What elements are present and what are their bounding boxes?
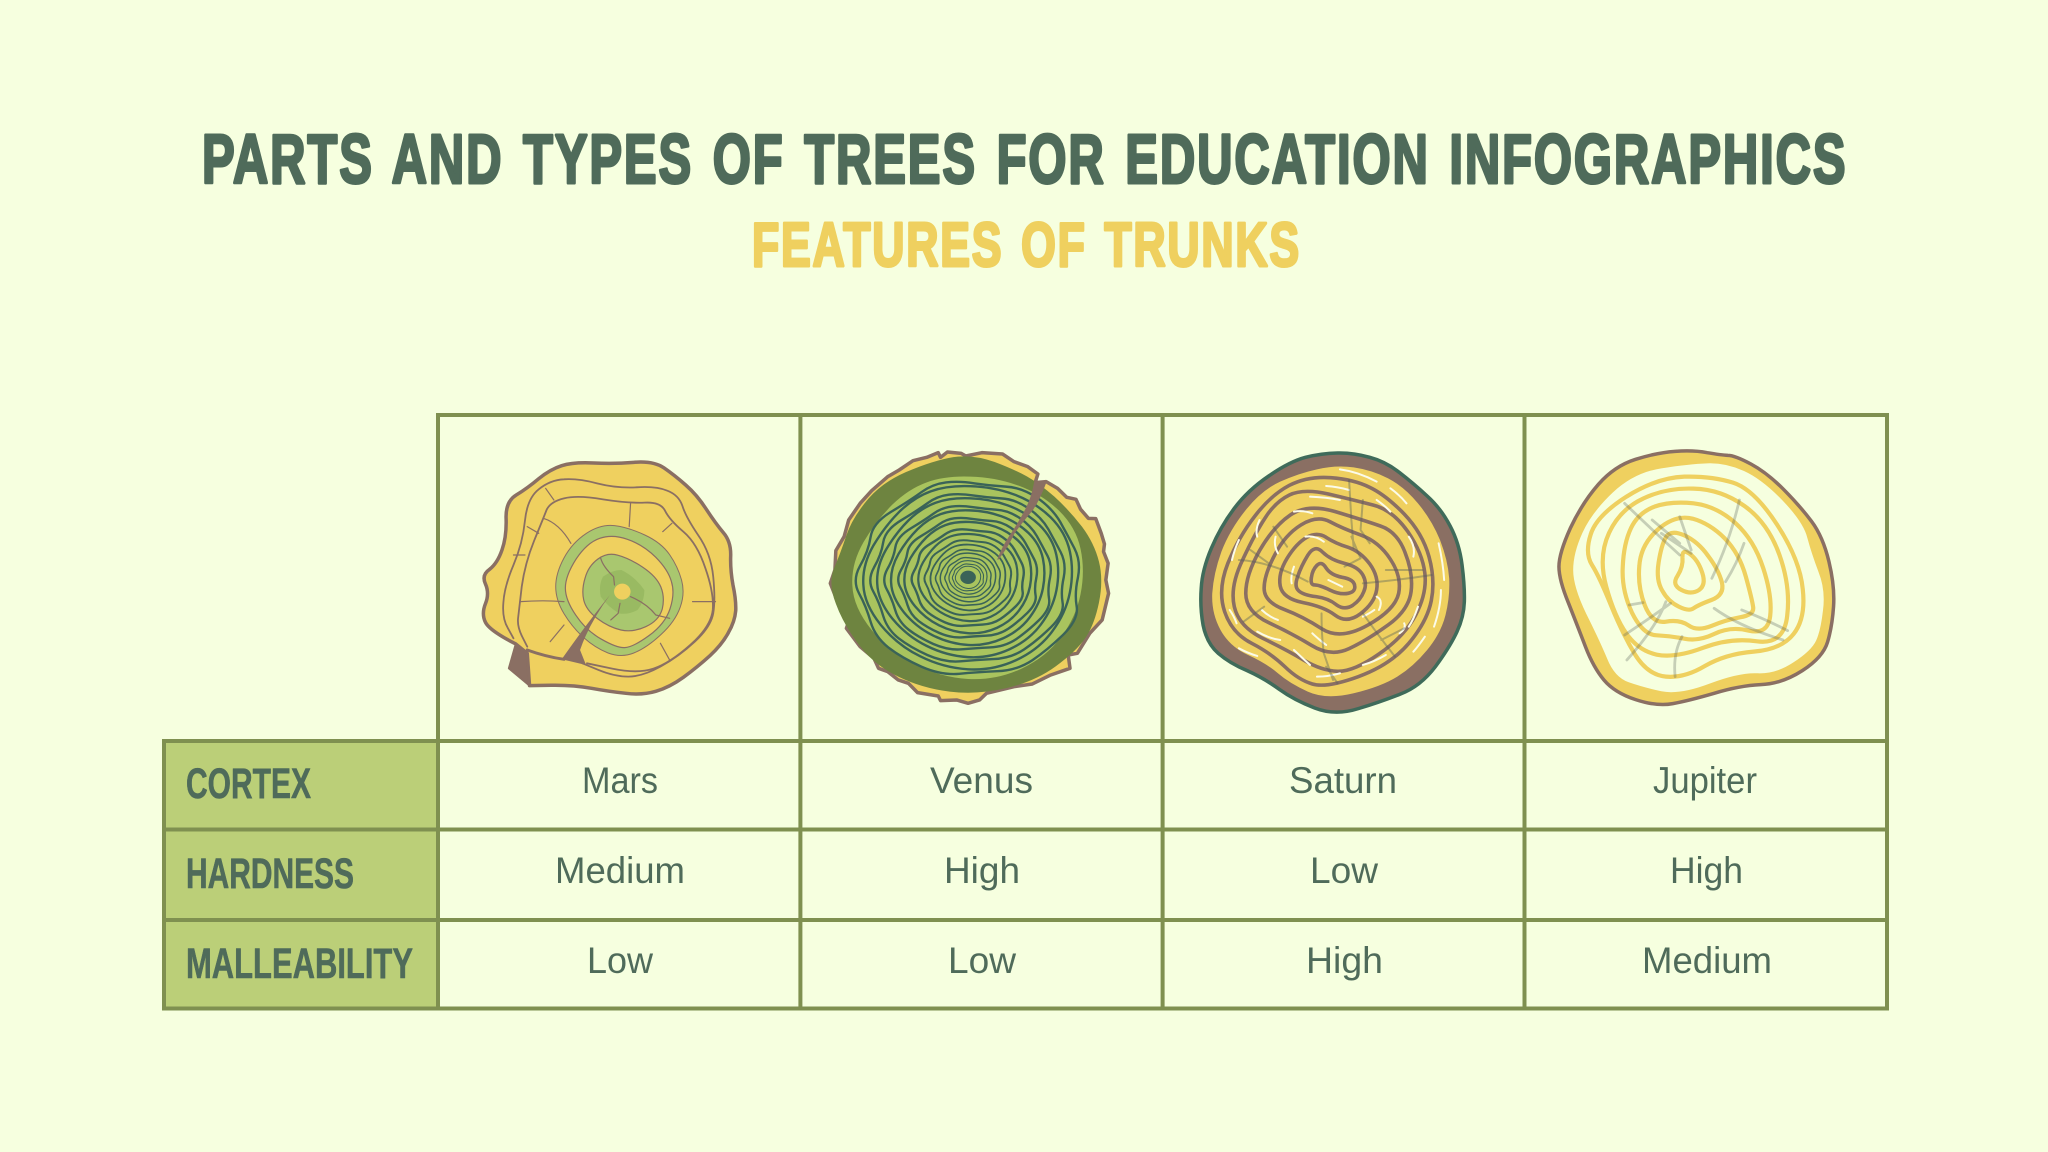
cell: Venus: Venus (930, 760, 1033, 801)
cell: malleability Jupiter: Medium (1642, 940, 1772, 981)
title: PARTS AND TYPES OF TREES FOR EDUCATION INFOGRAPHICS (202, 119, 1846, 198)
green band (556, 525, 683, 655)
cracks (1625, 500, 1788, 677)
crack (998, 482, 1046, 559)
row label: malleability: MALLEABILITY (186, 940, 413, 988)
growth rings (856, 482, 1079, 674)
icon: Mars trunk cross-section (483, 462, 736, 694)
crack (562, 595, 610, 665)
cell: Saturn: Saturn (1289, 760, 1397, 801)
cell: malleability Mars: Low (587, 940, 653, 981)
cell: hardness Jupiter: High (1670, 850, 1743, 891)
table grid (164, 413, 1887, 1010)
row label: hardness: HARDNESS (186, 850, 354, 898)
cell: Mars: Mars (582, 760, 658, 801)
row header column background (164, 741, 438, 1008)
cell: hardness Saturn: Low (1310, 850, 1378, 891)
cracks (1239, 480, 1432, 683)
cell: malleability Saturn: High (1306, 940, 1383, 981)
core (583, 554, 663, 631)
icon: Jupiter trunk cross-section (1559, 451, 1834, 705)
cell: Jupiter: Jupiter (1653, 760, 1757, 801)
table (164, 413, 1887, 1010)
highlights (1230, 469, 1444, 677)
cell: hardness Mars: Medium (555, 850, 685, 891)
rings (1222, 477, 1433, 685)
yellow band (565, 536, 673, 648)
cell: malleability Venus: Low (948, 940, 1016, 981)
cell: hardness Venus: High (944, 850, 1020, 891)
row label: cortex: CORTEX (186, 760, 311, 808)
subtitle: FEATURES OF TRUNKS (752, 211, 1299, 280)
icon: Saturn trunk cross-section (1201, 453, 1464, 712)
rings (1588, 477, 1803, 677)
icon: Venus trunk cross-section (830, 452, 1109, 703)
